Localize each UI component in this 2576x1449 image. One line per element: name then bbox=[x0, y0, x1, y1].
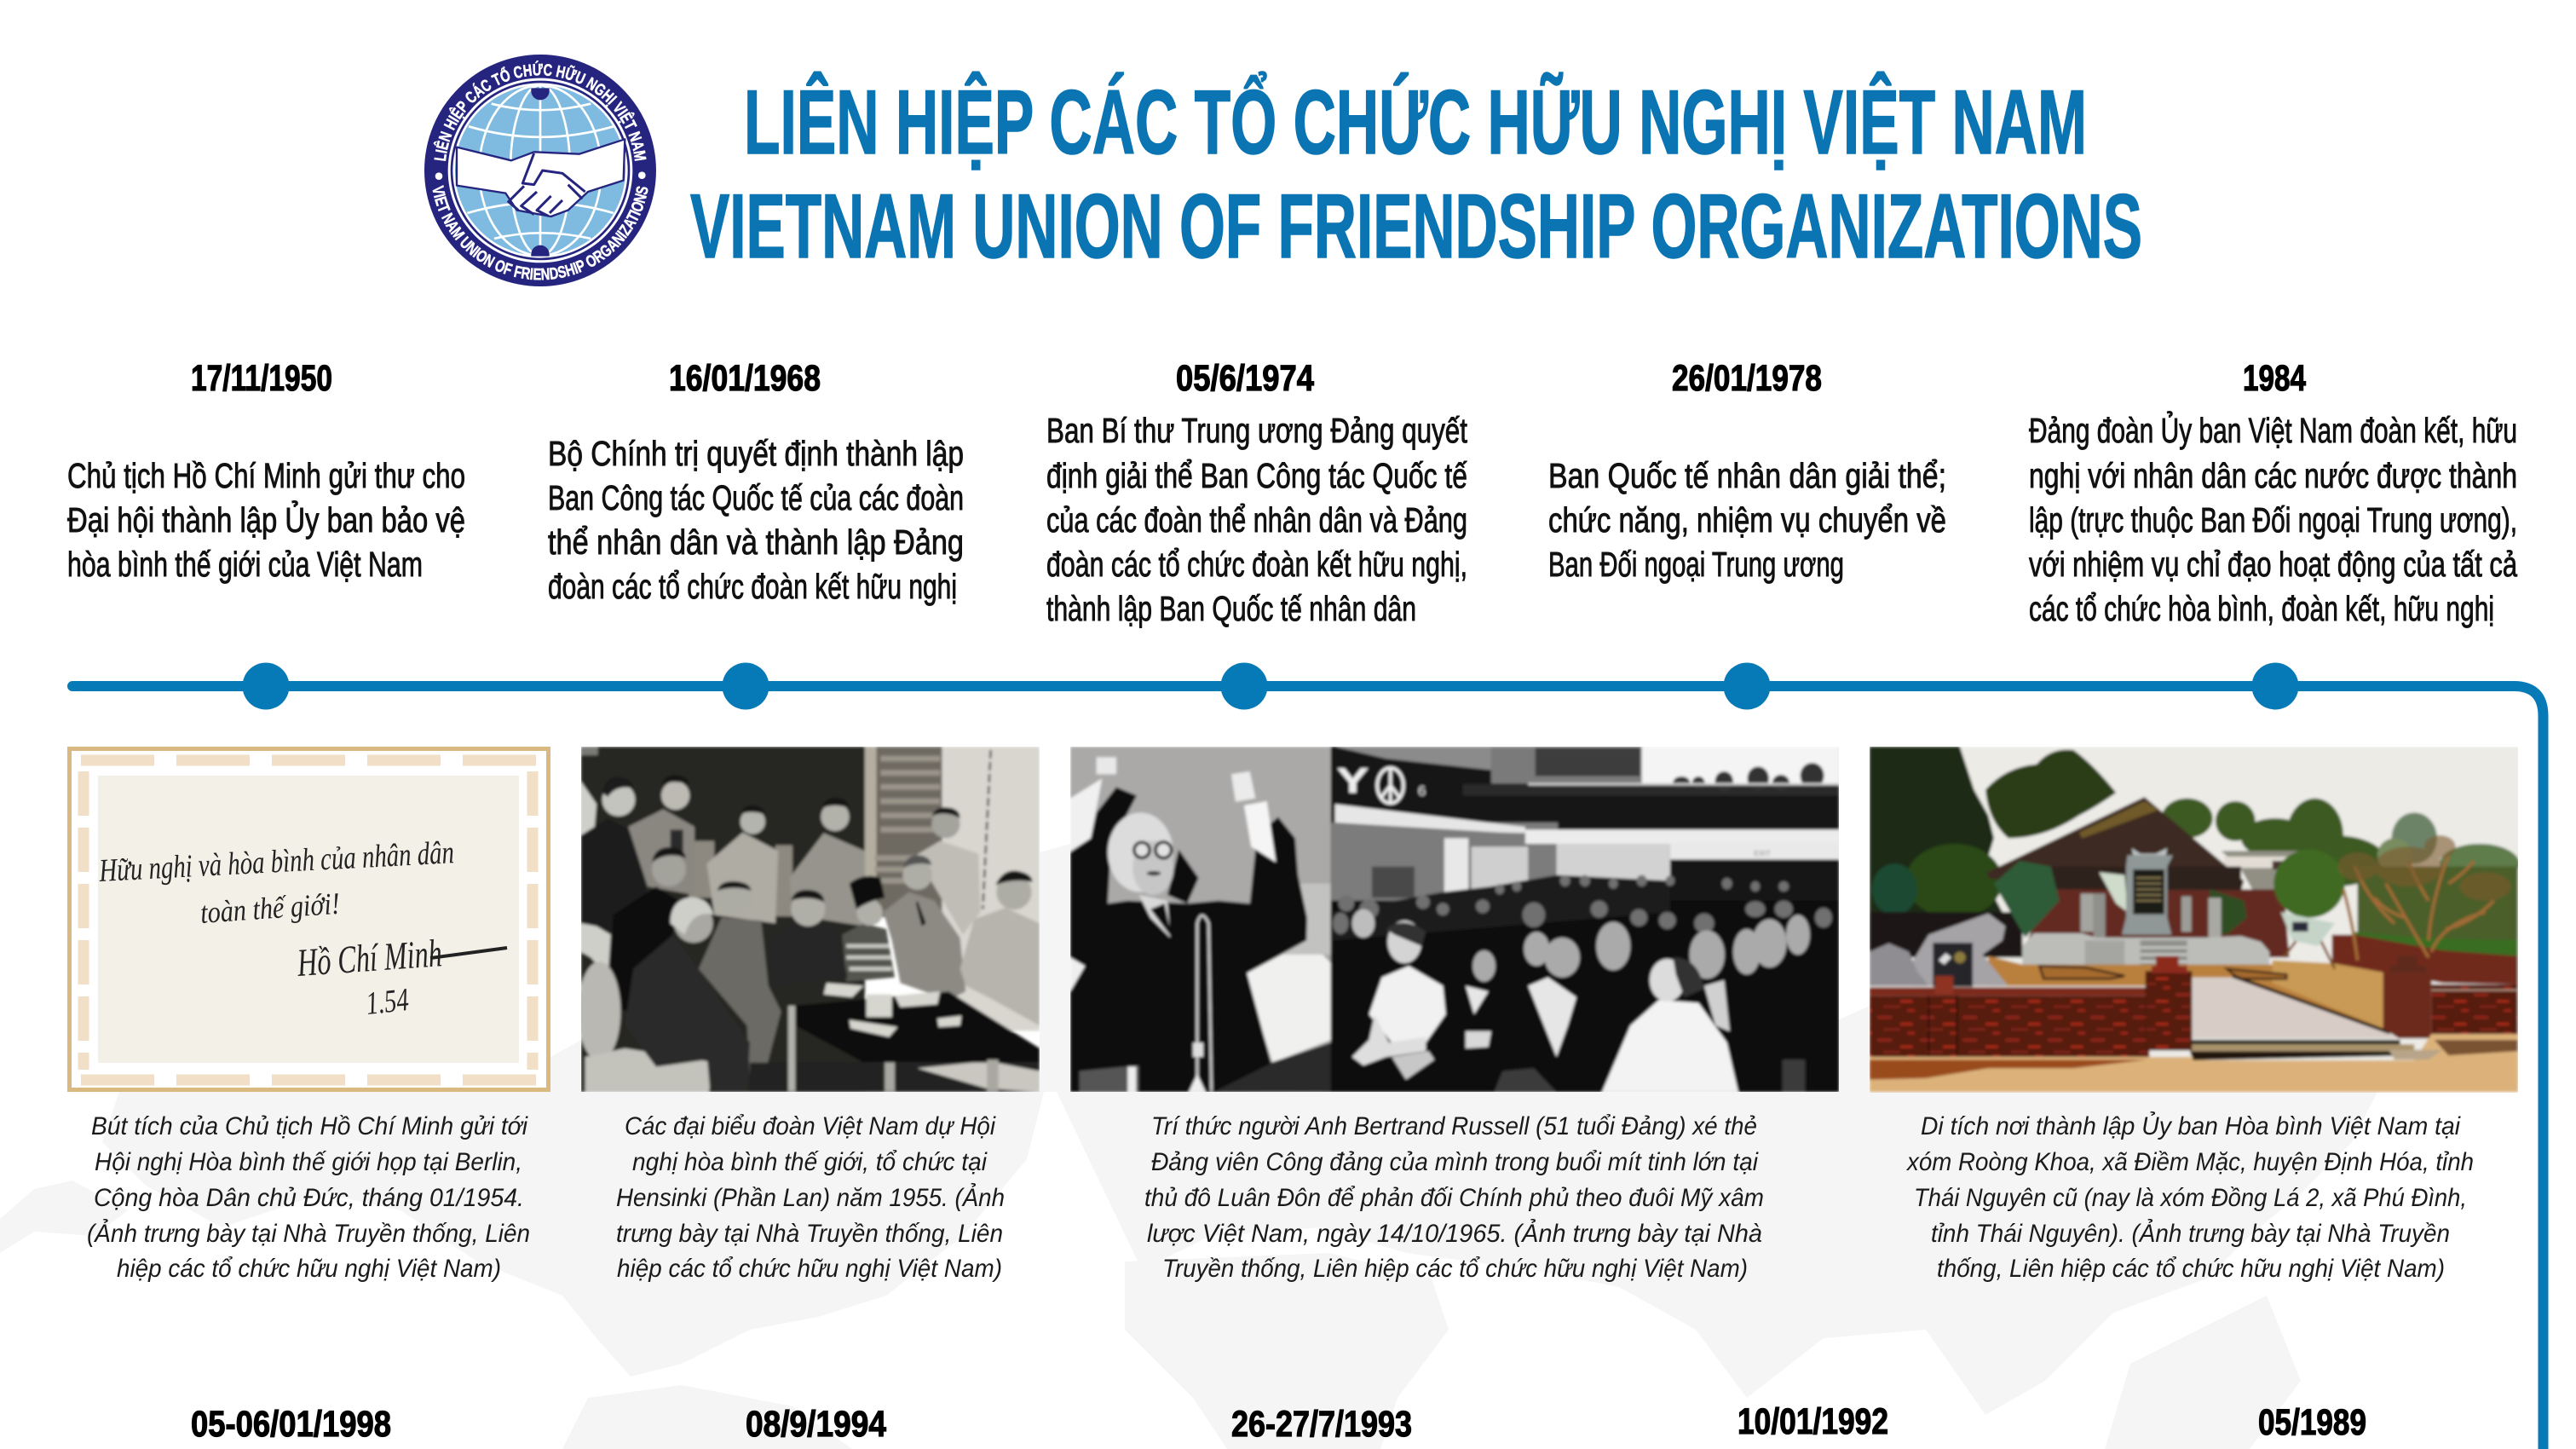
event 1978: Ban Quốc tế nhân dân giải thể; bbox=[1548, 456, 1946, 495]
event 1968: đoàn các tổ chức đoàn kết hữu nghị bbox=[548, 567, 957, 606]
caption 1: hiệp các tổ chức hữu nghị Việt Nam) bbox=[117, 1255, 501, 1283]
floor and table bbox=[750, 1063, 1040, 1092]
stele and platform bbox=[2081, 893, 2094, 932]
event 1974: định giải thể Ban Công tác Quốc tế bbox=[1046, 456, 1467, 495]
small tree bbox=[2273, 850, 2345, 918]
event 1978: chức năng, nhiệm vụ chuyển về bbox=[1548, 500, 1946, 540]
photo: Bertrand Russell rally bbox=[1070, 747, 1839, 1092]
photo: Bertrand Russell rally: Y bbox=[1336, 760, 1369, 800]
caption 2: trưng bày tại Nhà Truyền thống, Liên bbox=[616, 1220, 1003, 1248]
peace sign bbox=[1377, 768, 1403, 803]
event 1968: Ban Công tác Quốc tế của các đoàn bbox=[548, 478, 964, 517]
house bbox=[2221, 849, 2299, 892]
caption 1: (Ảnh trưng bày tại Nhà Truyền thống, Liên bbox=[87, 1219, 530, 1248]
right panel bbox=[1331, 747, 1839, 1092]
caption 4: thống, Liên hiệp các tổ chức hữu nghị Việt Nam) bbox=[1937, 1255, 2445, 1283]
event 1974 bbox=[1046, 358, 1467, 628]
caption 3: Trí thức người Anh Bertrand Russell (51 tuổi Đảng) xé thẻ bbox=[1151, 1112, 1757, 1140]
photo: Bertrand Russell rally: 6 bbox=[1418, 782, 1426, 799]
photo: Vietnamese delegates 1955 bbox=[578, 747, 1040, 1092]
caption 2: Hensinki (Phần Lan) năm 1955. (Ảnh bbox=[616, 1183, 1005, 1212]
photo: handwritten letter: Hữu nghị và hòa bình của nhân dân bbox=[98, 834, 455, 889]
seated woman bbox=[842, 923, 895, 982]
couch bbox=[578, 961, 620, 1061]
men front bbox=[1528, 978, 1576, 1057]
caption 2 bbox=[616, 1112, 1005, 1283]
bottom row dates bbox=[191, 1401, 2366, 1445]
event 1950: Chủ tịch Hồ Chí Minh gửi thư cho bbox=[67, 456, 465, 495]
photo: handwritten letter: Hồ Chí Minh bbox=[295, 931, 443, 984]
caption 4: Di tích nơi thành lập Ủy ban Hòa bình Việt Nam tại bbox=[1921, 1111, 2461, 1140]
ground bbox=[1988, 956, 2386, 1037]
rocks and plaque bbox=[1911, 914, 2008, 986]
logo bbox=[424, 55, 656, 286]
caption 3 bbox=[1144, 1112, 1764, 1283]
photo: Hoa Binh committee memorial site bbox=[1870, 747, 2520, 1092]
caption 4: Thái Nguyên cũ (nay là xóm Đồng Lá 2, xã Phú Đình, bbox=[1914, 1184, 2467, 1212]
caption 4 bbox=[1905, 1111, 2474, 1283]
frangipani bbox=[2343, 855, 2494, 961]
photo: handwritten letter: 1.54 bbox=[365, 982, 411, 1022]
front wall bbox=[1870, 987, 2149, 996]
distant trees bbox=[2162, 799, 2520, 886]
foreground ground bbox=[1870, 1034, 2518, 1092]
photo: handwritten letter bbox=[70, 748, 549, 1089]
banner and balcony bbox=[1491, 747, 1642, 783]
far right low wall and hedge bbox=[2332, 935, 2518, 984]
caption 3: Đảng viên Công đảng của mình trong buổi mít tinh lớn tại bbox=[1151, 1148, 1759, 1176]
event 1974: 05/6/1974 bbox=[1176, 358, 1314, 399]
walkway bbox=[2192, 978, 2397, 1038]
thatched roof bbox=[1987, 797, 2244, 891]
right woman bbox=[960, 908, 1040, 1025]
logo: VIET NAM UNION OF FRIENDSHIP ORGANIZATIONS bbox=[433, 185, 648, 280]
event 1968: thể nhân dân và thành lập Đảng bbox=[548, 522, 964, 562]
caption 1 bbox=[87, 1112, 530, 1283]
logo: LIÊN HIỆP CÁC TỔ CHỨC HỮU NGHỊ VIỆT NAM bbox=[433, 61, 647, 161]
event 1974: thành lập Ban Quốc tế nhân dân bbox=[1046, 589, 1416, 628]
event 1950: hòa bình thế giới của Việt Nam bbox=[67, 545, 423, 584]
back row bbox=[581, 818, 648, 935]
bottom row dates: 08/9/1994 bbox=[746, 1404, 886, 1445]
caption 4: tỉnh Thái Nguyên). (Ảnh trưng bày tại Nhà Truyền bbox=[1931, 1219, 2450, 1248]
event 1978: Ban Đối ngoại Trung ương bbox=[1548, 545, 1844, 584]
timeline line with turn down right side bbox=[72, 686, 2543, 1449]
bottom row dates: 26-27/7/1993 bbox=[1231, 1404, 1412, 1445]
event 1984 bbox=[2029, 358, 2517, 628]
right pillar and wall bbox=[2383, 972, 2431, 1038]
title bbox=[690, 71, 2142, 277]
old man seated right bbox=[884, 892, 965, 1000]
wall bbox=[2022, 889, 2290, 957]
event 1984: 1984 bbox=[2243, 358, 2306, 399]
crowd bbox=[1331, 901, 1839, 1092]
caption 2: hiệp các tổ chức hữu nghị Việt Nam) bbox=[617, 1255, 1002, 1283]
bottom row dates: 05/1989 bbox=[2258, 1402, 2366, 1443]
event 1978: 26/01/1978 bbox=[1672, 358, 1822, 399]
caption 4: xóm Roòng Khoa, xã Điềm Mặc, huyện Định Hóa, tỉnh bbox=[1905, 1148, 2474, 1176]
event 1950: Đại hội thành lập Ủy ban bảo vệ bbox=[67, 500, 465, 540]
caption 2: nghị hòa bình thế giới, tổ chức tại bbox=[632, 1148, 988, 1176]
event 1974: đoàn các tổ chức đoàn kết hữu nghị, bbox=[1046, 545, 1467, 584]
caption 3: Truyền thống, Liên hiệp các tổ chức hữu nghị Việt Nam) bbox=[1162, 1255, 1748, 1283]
event 1968 bbox=[548, 358, 964, 606]
timeline dots bbox=[242, 663, 2299, 709]
event 1968: Bộ Chính trị quyết định thành lập bbox=[548, 434, 964, 473]
event 1974: của các đoàn thể nhân dân và Đảng bbox=[1046, 500, 1467, 540]
photo: handwritten letter: toàn thế giới! bbox=[199, 886, 341, 930]
caption 3: lược Việt Nam, ngày 14/10/1965. (Ảnh trưng bày tại Nhà bbox=[1147, 1219, 1762, 1248]
left dark trees bbox=[1870, 747, 2004, 915]
background world map watermark bbox=[0, 844, 2377, 1449]
photo: Bertrand Russell rally: EXIT bbox=[1754, 849, 1771, 857]
middle bbox=[608, 886, 679, 1012]
caption 2: Các đại biểu đoàn Việt Nam dự Hội bbox=[625, 1112, 996, 1140]
caption 1: Cộng hòa Dân chủ Đức, tháng 01/1954. bbox=[94, 1184, 524, 1212]
bottom row dates: 10/01/1992 bbox=[1738, 1401, 1888, 1442]
caption 1: Bút tích của Chủ tịch Hồ Chí Minh gửi tới bbox=[91, 1112, 528, 1140]
event 1950: 17/11/1950 bbox=[191, 358, 332, 399]
event 1978 bbox=[1548, 358, 1946, 584]
caption 1: Hội nghị Hòa bình thế giới họp tại Berlin, bbox=[95, 1148, 522, 1176]
event 1968: 16/01/1968 bbox=[669, 358, 821, 399]
caption 3: thủ đô Luân Đôn để phản đối Chính phủ theo đuôi Mỹ xâm bbox=[1144, 1184, 1764, 1212]
seated men bbox=[844, 970, 848, 978]
palm bbox=[1994, 861, 2060, 938]
event 1974: Ban Bí thư Trung ương Đảng quyết bbox=[1046, 411, 1467, 450]
bottom row dates: 05-06/01/1998 bbox=[191, 1404, 391, 1445]
event 1950 bbox=[67, 358, 465, 584]
